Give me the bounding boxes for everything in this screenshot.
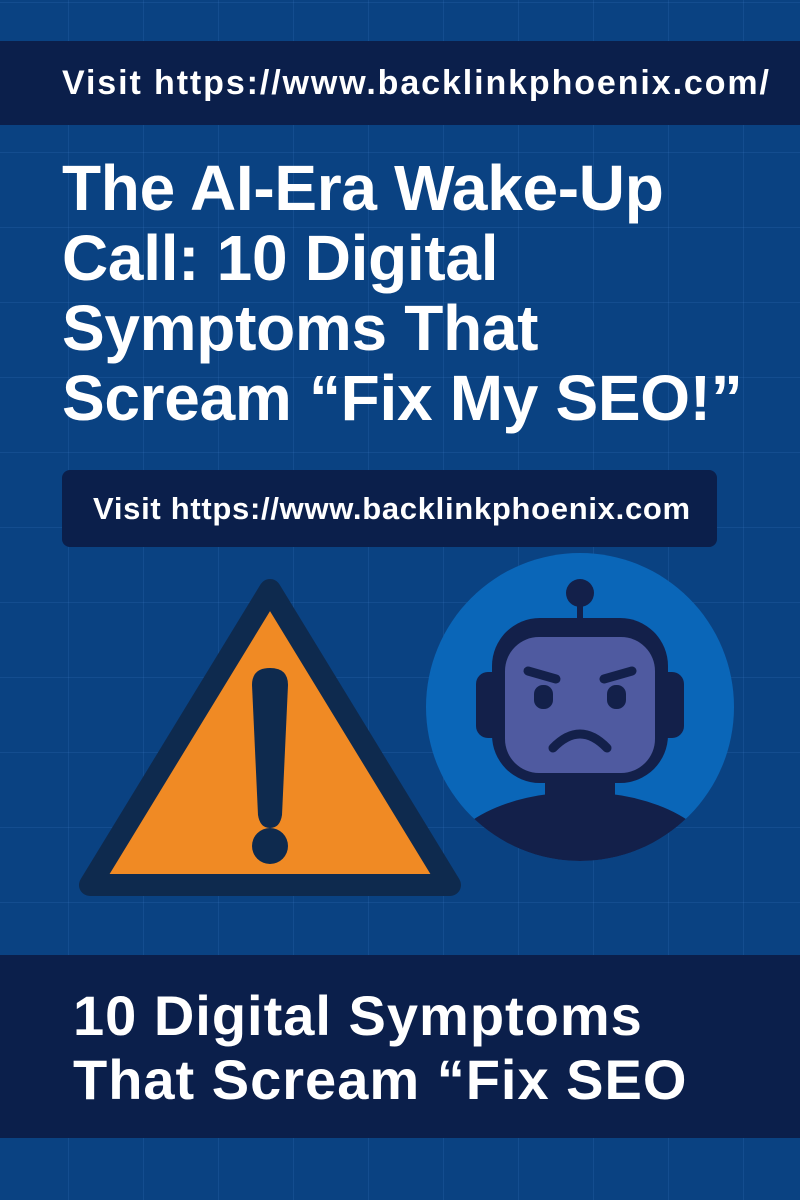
top banner	[0, 41, 800, 125]
bottom text: 10 Digital Symptoms	[73, 984, 643, 1047]
title: Symptoms That	[62, 292, 538, 364]
title: Call: 10 Digital	[62, 222, 498, 294]
icon: angry robot	[426, 553, 734, 861]
title: The AI-Era Wake-Up	[62, 152, 664, 224]
bottom text: That Scream “Fix SEO	[73, 1048, 687, 1111]
title: Scream “Fix My SEO!”	[62, 362, 742, 434]
url box	[62, 470, 717, 547]
bottom text	[73, 984, 687, 1111]
top url text: Visit https://www.backlinkphoenix.com/	[62, 64, 771, 102]
url box text: Visit https://www.backlinkphoenix.com	[93, 491, 691, 526]
title	[62, 152, 742, 434]
bottom banner	[0, 955, 800, 1138]
